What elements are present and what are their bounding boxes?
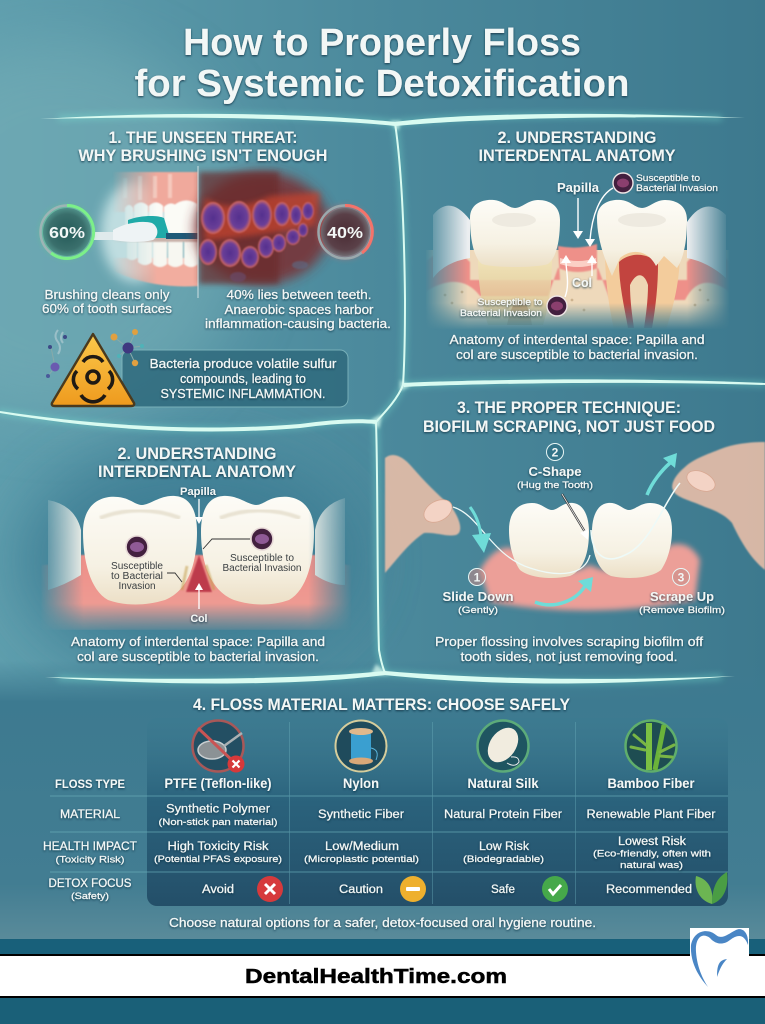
- panel: proper technique: [385, 398, 765, 664]
- row: material: Synthetic Fiber: [318, 809, 404, 821]
- step 2: c-shape: 2: [552, 446, 559, 460]
- step 1: slide down: [442, 568, 514, 616]
- footer website: DentalHealthTime.com: [245, 966, 507, 988]
- label: susceptible left: [111, 561, 182, 592]
- illustration: left tooth: [509, 503, 589, 578]
- label: papilla: Papilla: [557, 180, 600, 195]
- icon: caution: [400, 876, 426, 902]
- step 2: c-shape: [517, 444, 593, 540]
- row: health impact: Low Risk: [479, 841, 529, 853]
- row: material: Synthetic Polymer: [166, 804, 270, 816]
- row: detox focus: (Safety): [71, 891, 109, 902]
- label: susceptible upper: Susceptible to: [636, 173, 700, 184]
- icon: biohazard warning: [52, 334, 134, 406]
- table background: [147, 718, 728, 906]
- title: [134, 22, 630, 105]
- row: floss type: PTFE (Teflon-like): [164, 775, 272, 791]
- icon: bamboo: [626, 720, 676, 772]
- callout: systemic inflammation: compounds, leading to: [180, 372, 306, 386]
- section: floss material comparison: [43, 695, 728, 930]
- glowing panel dividers: [0, 115, 765, 682]
- text: between teeth stat: 40% lies between teeth.: [226, 288, 372, 302]
- step 1: slide down: 1: [474, 570, 481, 584]
- illustration: left hand: [385, 455, 460, 573]
- row: health impact: (Potential PFAS exposure): [154, 854, 282, 865]
- heading: interdental anatomy: [478, 128, 676, 165]
- callout: systemic inflammation: SYSTEMIC INFLAMMATION.: [160, 387, 326, 401]
- label: papilla: [180, 486, 217, 524]
- heading: interdental anatomy: 2. UNDERSTANDING: [498, 128, 656, 147]
- icon: nylon spool: [336, 720, 386, 772]
- divider line between halves: [197, 166, 199, 298]
- footer: [0, 928, 765, 1024]
- step 2: c-shape: C-Shape: [528, 465, 582, 479]
- caption: anatomy: Anatomy of interdental space: Papilla and: [71, 635, 325, 649]
- row: floss type: Bamboo Fiber: [608, 775, 695, 791]
- row: floss type: FLOSS TYPE: [55, 777, 125, 791]
- row: detox focus: DETOX FOCUS: [48, 876, 132, 890]
- gauge: 40%: [318, 205, 372, 259]
- heading: floss material: 4. FLOSS MATERIAL MATTERS: CHOOSE SAFELY: [193, 695, 571, 714]
- heading: unseen threat: 1. THE UNSEEN THREAT:: [108, 128, 298, 147]
- label: susceptible right: [203, 539, 302, 574]
- arrow: slide down: [470, 507, 491, 553]
- label: susceptible upper: [585, 173, 718, 247]
- heading: proper technique: [423, 398, 715, 436]
- text: between teeth stat: inflammation-causing bacteria.: [205, 317, 391, 331]
- row: health impact: [43, 836, 711, 871]
- label: papilla: Papilla: [180, 486, 217, 498]
- label: susceptible upper: Bacterial Invasion: [636, 183, 718, 194]
- label: susceptible right: Bacterial Invasion: [222, 563, 302, 574]
- heading: interdental anatomy: INTERDENTAL ANATOMY: [478, 146, 676, 165]
- heading: interdental anatomy: [98, 444, 297, 481]
- step 1: slide down: Slide Down: [442, 589, 514, 604]
- step 3: scrape up: Scrape Up: [650, 589, 714, 604]
- closing note: Choose natural options for a safer, detox-focused oral hygiene routine.: [169, 916, 596, 930]
- row: material: MATERIAL: [60, 807, 120, 821]
- row: health impact: HEALTH IMPACT: [43, 839, 138, 853]
- label: susceptible right: Susceptible to: [230, 553, 294, 564]
- caption: anatomy: col are susceptible to bacterial invasion.: [77, 650, 319, 664]
- step 3: scrape up: [639, 568, 725, 616]
- icon: sulfur molecules: [46, 329, 144, 378]
- caption: anatomy: [450, 333, 705, 362]
- illustration: bacteria between teeth: [194, 172, 330, 284]
- label: susceptible left: Susceptible: [111, 561, 163, 572]
- illustration: tooth cross-section: [425, 200, 730, 330]
- heading: proper technique: 3. THE PROPER TECHNIQUE:: [457, 398, 681, 417]
- label: susceptible left: to Bacterial: [111, 571, 163, 582]
- step 2: c-shape: (Hug the Tooth): [517, 480, 593, 491]
- illustration: two molars and gums: [40, 496, 352, 630]
- cut tooth: [605, 252, 680, 322]
- step 3: scrape up: 3: [678, 570, 685, 584]
- icon: safe: [542, 876, 568, 902]
- row: detox focus: Caution: [339, 884, 383, 896]
- text: brushing stat: 60% of tooth surfaces: [42, 302, 172, 316]
- text: between teeth stat: Anaerobic spaces harbor: [224, 303, 374, 317]
- illustration: right tooth: [592, 503, 672, 578]
- label: col: Col: [190, 613, 208, 625]
- row: material: Natural Protein Fiber: [444, 809, 562, 821]
- label: susceptible lower: Bacterial Invasion: [460, 308, 542, 319]
- caption: anatomy: col are susceptible to bacterial invasion.: [456, 348, 698, 362]
- caption: technique: [435, 635, 704, 664]
- panel: interdental anatomy cross-section: [425, 128, 730, 362]
- row: detox focus: Safe: [491, 884, 515, 896]
- icon: bacteria right: [251, 528, 273, 550]
- arrow: scrape up: [647, 453, 677, 495]
- label: col: Col: [572, 276, 592, 290]
- illustration: gums: [480, 544, 700, 611]
- title: How to Properly Floss: [183, 22, 581, 64]
- illustration: clean teeth with toothbrush: [92, 172, 198, 286]
- illustration: floss: [453, 483, 680, 574]
- callout: systemic inflammation: Bacteria produce volatile sulfur: [150, 357, 336, 371]
- heading: interdental anatomy: 2. UNDERSTANDING: [118, 444, 276, 463]
- title: for Systemic Detoxification: [134, 63, 630, 105]
- step 1: slide down: (Gently): [458, 605, 498, 616]
- label: col: [561, 255, 597, 297]
- step 3: scrape up: (Remove Biofilm): [639, 605, 725, 616]
- heading: proper technique: BIOFILM SCRAPING, NOT JUST FOOD: [423, 417, 715, 436]
- row: health impact: (Microplastic potential): [304, 854, 419, 865]
- label: susceptible lower: [460, 296, 567, 319]
- left roots: [478, 258, 552, 325]
- icon: silk cocoon: [478, 720, 528, 772]
- row: health impact: (Biodegradable): [463, 854, 544, 865]
- icon: recommended leaf: [696, 872, 727, 904]
- row: health impact: High Toxicity Risk: [168, 841, 269, 853]
- row: floss type: Natural Silk: [468, 775, 539, 791]
- row: detox focus: [48, 876, 692, 902]
- row: health impact: (Eco-friendly, often with: [593, 848, 711, 860]
- callout: systemic inflammation: [122, 350, 348, 407]
- row: detox focus: Recommended: [606, 884, 692, 896]
- caption: anatomy: [71, 635, 325, 664]
- heading: unseen threat: WHY BRUSHING ISN'T ENOUGH: [78, 146, 328, 165]
- text: between teeth stat: [205, 288, 391, 331]
- label: papilla: [557, 180, 600, 239]
- row: health impact: Low/Medium: [325, 841, 399, 853]
- divider tapered lines: [0, 114, 765, 684]
- gauge: 60%: [40, 205, 94, 259]
- panel: interdental anatomy front view: [40, 444, 352, 664]
- row: material: [60, 804, 716, 828]
- row: floss type: [55, 775, 695, 791]
- text: brushing stat: Brushing cleans only: [44, 288, 170, 302]
- label: susceptible left: Invasion: [118, 581, 156, 592]
- caption: technique: tooth sides, not just removing food.: [460, 650, 678, 664]
- heading: interdental anatomy: INTERDENTAL ANATOMY: [98, 462, 297, 481]
- gauge: 40%: 40%: [327, 225, 363, 242]
- row: health impact: (Toxicity Risk): [56, 854, 124, 866]
- heading: unseen threat: [78, 128, 328, 165]
- text: brushing stat: [42, 288, 172, 316]
- icon: non-stick pan: [192, 720, 244, 772]
- row: health impact: Lowest Risk: [618, 836, 686, 848]
- label: col: [190, 583, 208, 625]
- table grid: [50, 722, 728, 904]
- arrow: under gum: [535, 577, 593, 605]
- row: health impact: natural was): [620, 860, 683, 871]
- gauge: 60%: 60%: [49, 225, 85, 242]
- row: material: (Non-stick pan material): [158, 817, 278, 828]
- label: susceptible lower: Susceptible to: [478, 297, 542, 308]
- caption: anatomy: Anatomy of interdental space: Papilla and: [450, 333, 705, 347]
- panel: the unseen threat: [40, 128, 391, 407]
- caption: technique: Proper flossing involves scraping biofilm off: [435, 635, 704, 649]
- icon: avoid: [257, 876, 283, 902]
- row: detox focus: Avoid: [202, 884, 234, 896]
- illustration: right hand: [672, 442, 765, 570]
- row: floss type: Nylon: [343, 775, 379, 791]
- logo: tooth: [690, 928, 749, 987]
- row: material: Renewable Plant Fiber: [586, 809, 716, 821]
- icon: bacteria left: [126, 536, 148, 558]
